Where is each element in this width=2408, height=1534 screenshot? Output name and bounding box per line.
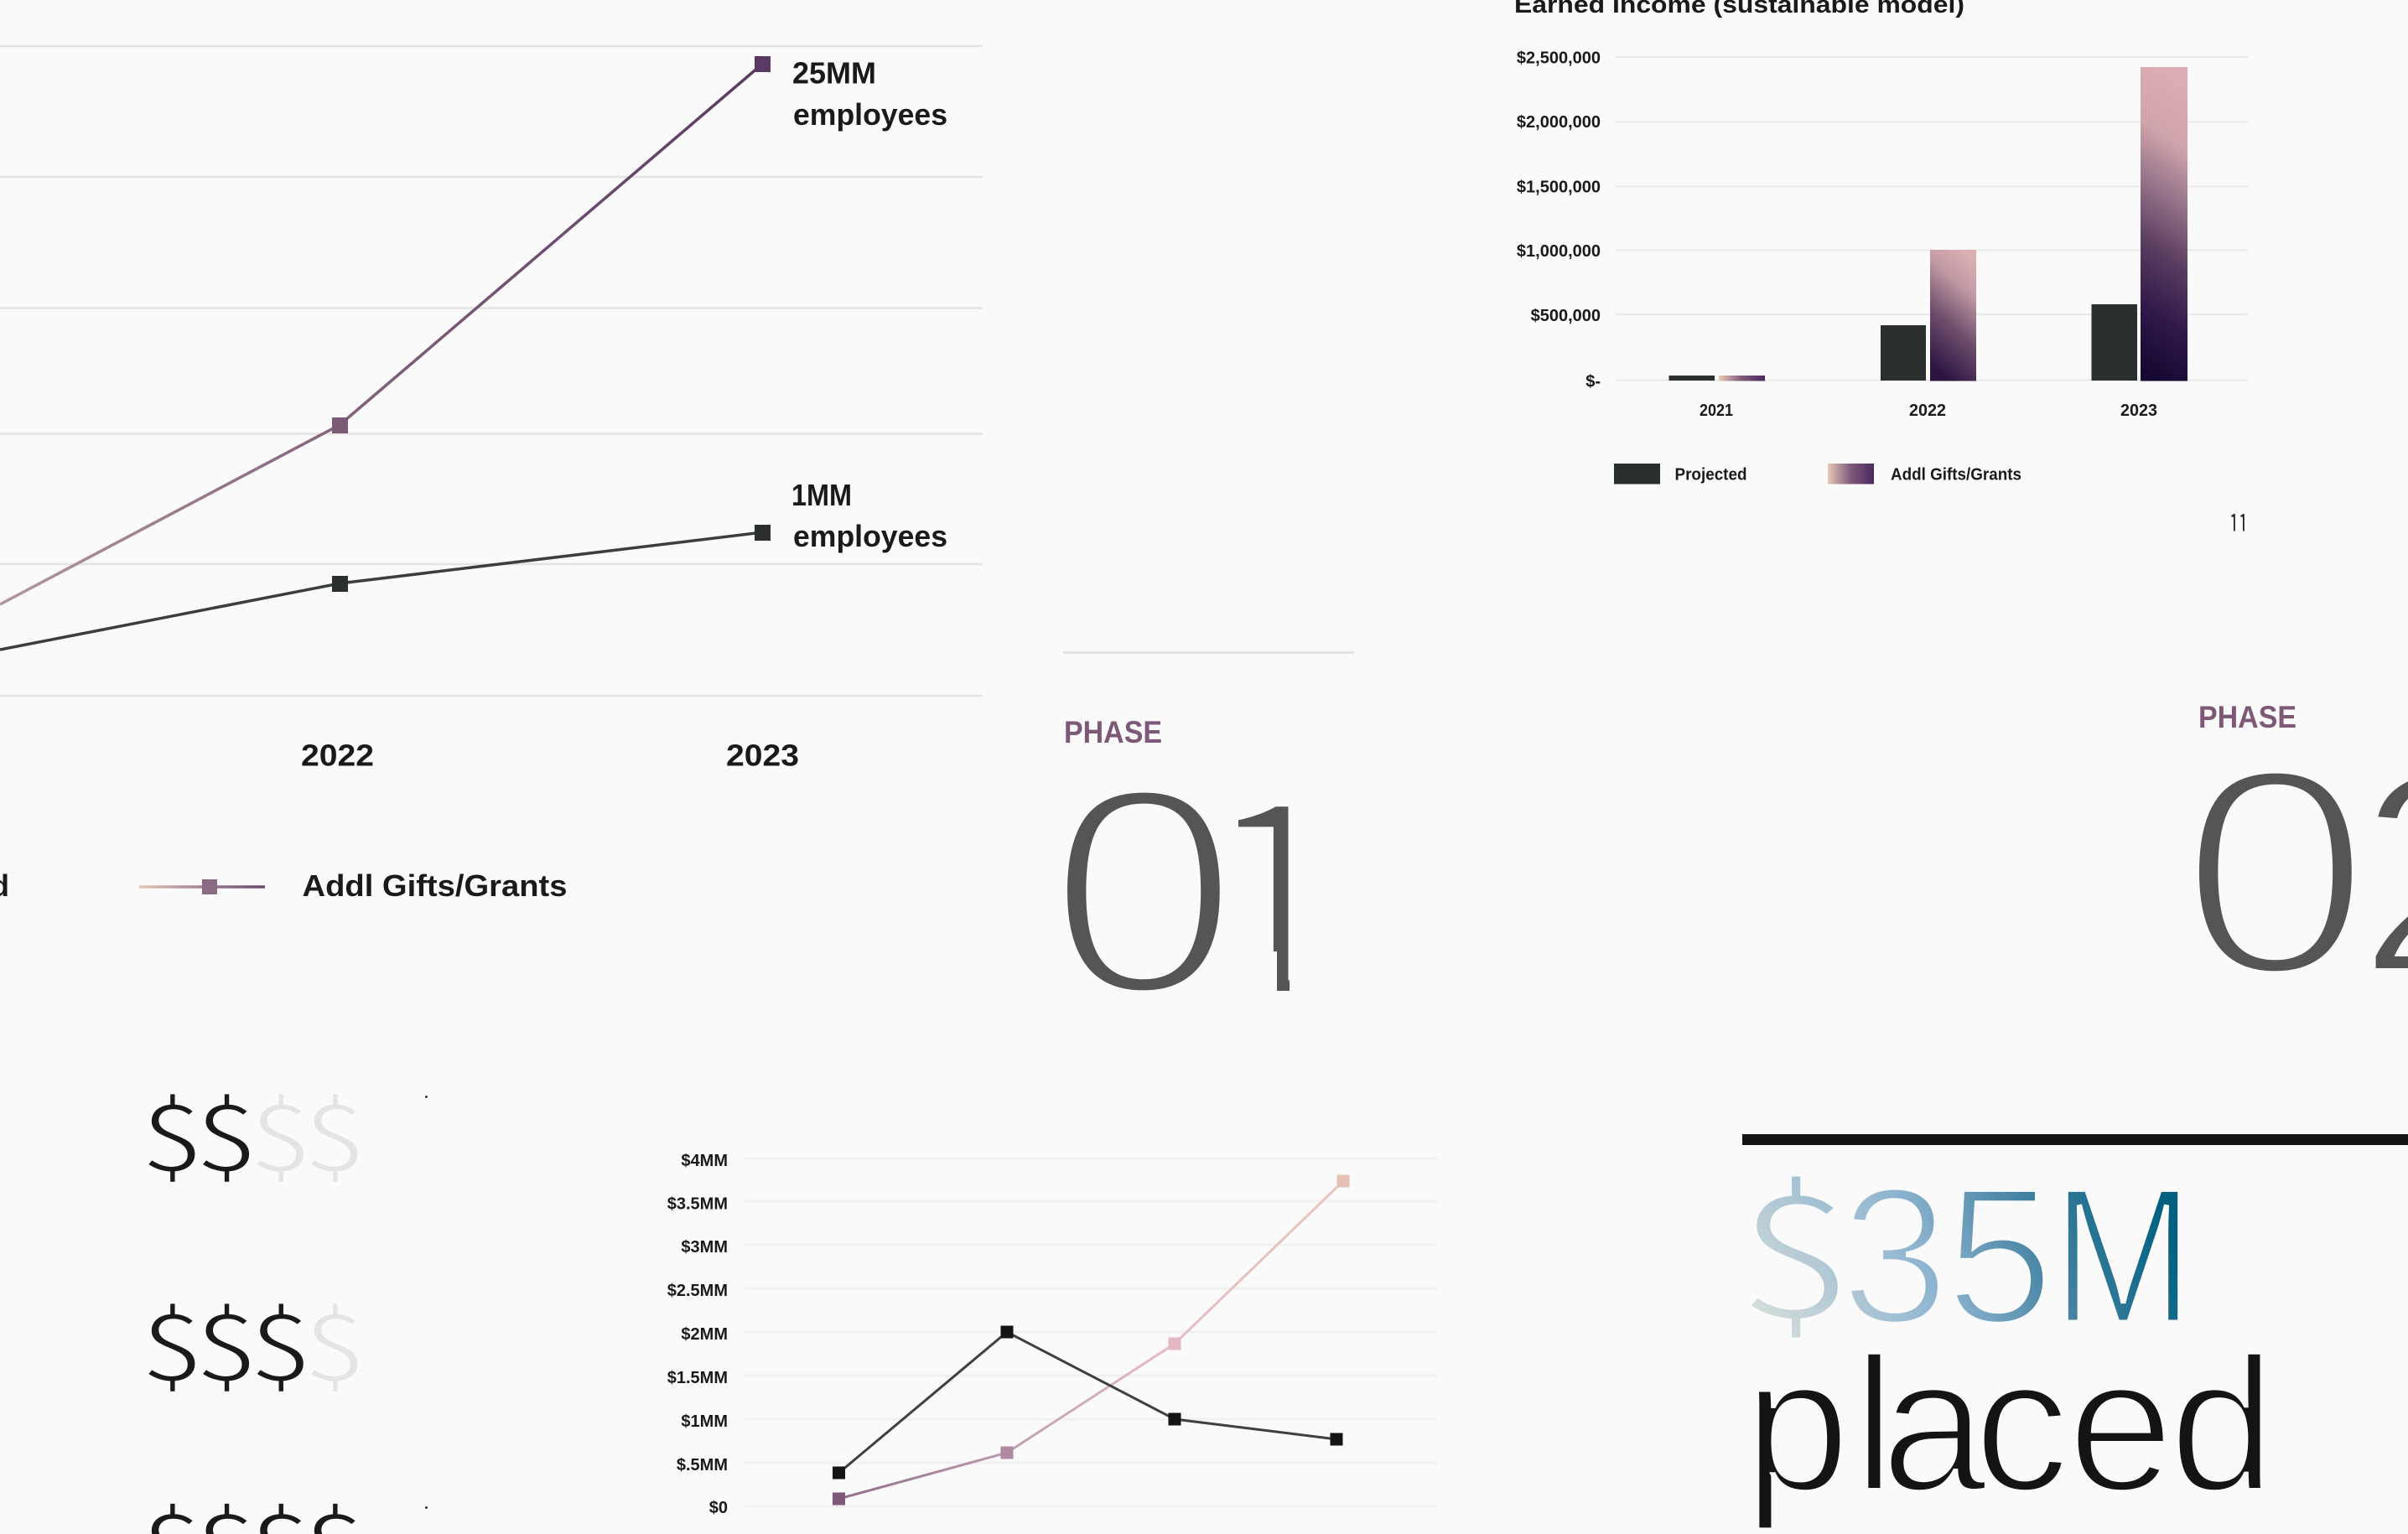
rating: three of four xyxy=(140,1272,366,1409)
label: 25MM employees: 25MM xyxy=(792,55,876,91)
word: placed: e xyxy=(2068,1319,2174,1531)
callout: $35M placed xyxy=(1736,1119,2408,1531)
y axis labels: $2,500,000 xyxy=(1517,49,1601,67)
word: placed: c xyxy=(1974,1319,2069,1531)
word: placed: a xyxy=(1881,1319,1987,1531)
line: black series xyxy=(833,1326,1343,1479)
rating: two of four: $ xyxy=(248,1063,313,1200)
rating: three of four: $ xyxy=(140,1272,204,1409)
line: projected series xyxy=(0,525,771,650)
chart: employees reached line chart xyxy=(0,46,983,903)
y axis labels: $500,000 xyxy=(1531,307,1601,325)
phase label: PHASE xyxy=(1064,715,1162,749)
x axis labels xyxy=(1700,402,2157,420)
y axis labels: $- xyxy=(1585,372,1601,391)
y axis labels: $1,000,000 xyxy=(1517,242,1601,261)
line: additional gifts and grants series xyxy=(0,56,771,604)
y axis labels: $1.5MM xyxy=(667,1369,728,1387)
y axis labels: $3MM xyxy=(681,1238,728,1257)
label: 25MM employees: employees xyxy=(793,97,947,132)
phase label: PHASE xyxy=(2198,700,2296,734)
page number: 11 xyxy=(2229,501,2248,542)
x axis labels: 2023 xyxy=(726,738,799,773)
rating: two of four xyxy=(140,1063,366,1200)
y axis labels: $.5MM xyxy=(677,1456,728,1474)
rating: three of four: $ xyxy=(195,1272,258,1409)
y axis labels: $2.5MM xyxy=(667,1282,728,1300)
label: 1MM employees: 1MM xyxy=(791,478,852,512)
legend: Projected xyxy=(1675,466,1747,485)
legend xyxy=(1614,464,2021,485)
x axis labels xyxy=(301,738,799,773)
phase 01 xyxy=(1063,651,1354,991)
y axis labels: $0 xyxy=(709,1499,728,1517)
bars xyxy=(1668,67,2187,381)
figure: $35M: $ xyxy=(1735,1119,1855,1369)
figure: $35M: 5 xyxy=(1945,1148,2054,1365)
phase number 01: 0 xyxy=(1048,727,1239,1055)
phase number 01 xyxy=(1067,793,1290,991)
legend: Addl Gifts/Grants xyxy=(302,868,567,903)
rating: four of four xyxy=(140,1473,366,1534)
rating: two of four: $ xyxy=(195,1063,258,1200)
x axis labels: 2023 xyxy=(2120,402,2157,420)
legend xyxy=(0,868,567,903)
y axis labels: $2,000,000 xyxy=(1517,113,1601,132)
phase number 01: 1 xyxy=(1200,680,1351,1075)
label: 1MM employees: employees xyxy=(793,519,947,553)
x axis labels: 2022 xyxy=(1909,402,1946,420)
label: 25MM employees xyxy=(792,55,947,132)
rating: two of four: $ xyxy=(303,1063,366,1200)
word: placed xyxy=(1744,1319,2276,1531)
y axis labels: $1,500,000 xyxy=(1517,178,1601,196)
figure: $35M xyxy=(1736,1119,2194,1369)
rating: three of four: $ xyxy=(303,1272,366,1409)
y axis labels: $3.5MM xyxy=(667,1195,728,1214)
y axis labels: $2MM xyxy=(681,1325,728,1344)
line: pink series xyxy=(833,1175,1350,1505)
y axis labels: $1MM xyxy=(681,1412,728,1431)
label: 1MM employees xyxy=(791,478,947,553)
figure: $35M: 3 xyxy=(1841,1148,1949,1365)
cost rating rows xyxy=(140,1063,366,1534)
word: placed: l xyxy=(1853,1319,1896,1531)
word: placed: d xyxy=(2169,1319,2276,1531)
legend: Addl Gifts/Grants xyxy=(1891,466,2021,485)
x axis labels: 2021 xyxy=(1700,402,1733,420)
y axis labels xyxy=(667,1152,728,1517)
chart: funding line chart xyxy=(667,1152,1437,1517)
phase number 02: 0 xyxy=(2180,707,2371,1035)
phase 02 xyxy=(2180,700,2408,1035)
rating: two of four: $ xyxy=(140,1063,204,1200)
chart: earned income bar chart xyxy=(1514,0,2248,542)
word: placed: p xyxy=(1744,1319,1850,1531)
rating: three of four: $ xyxy=(248,1272,313,1409)
figure: $35M: M xyxy=(2052,1148,2194,1365)
y axis labels xyxy=(1517,49,1601,391)
y axis labels: $4MM xyxy=(681,1152,728,1170)
x axis labels: 2022 xyxy=(301,738,374,773)
